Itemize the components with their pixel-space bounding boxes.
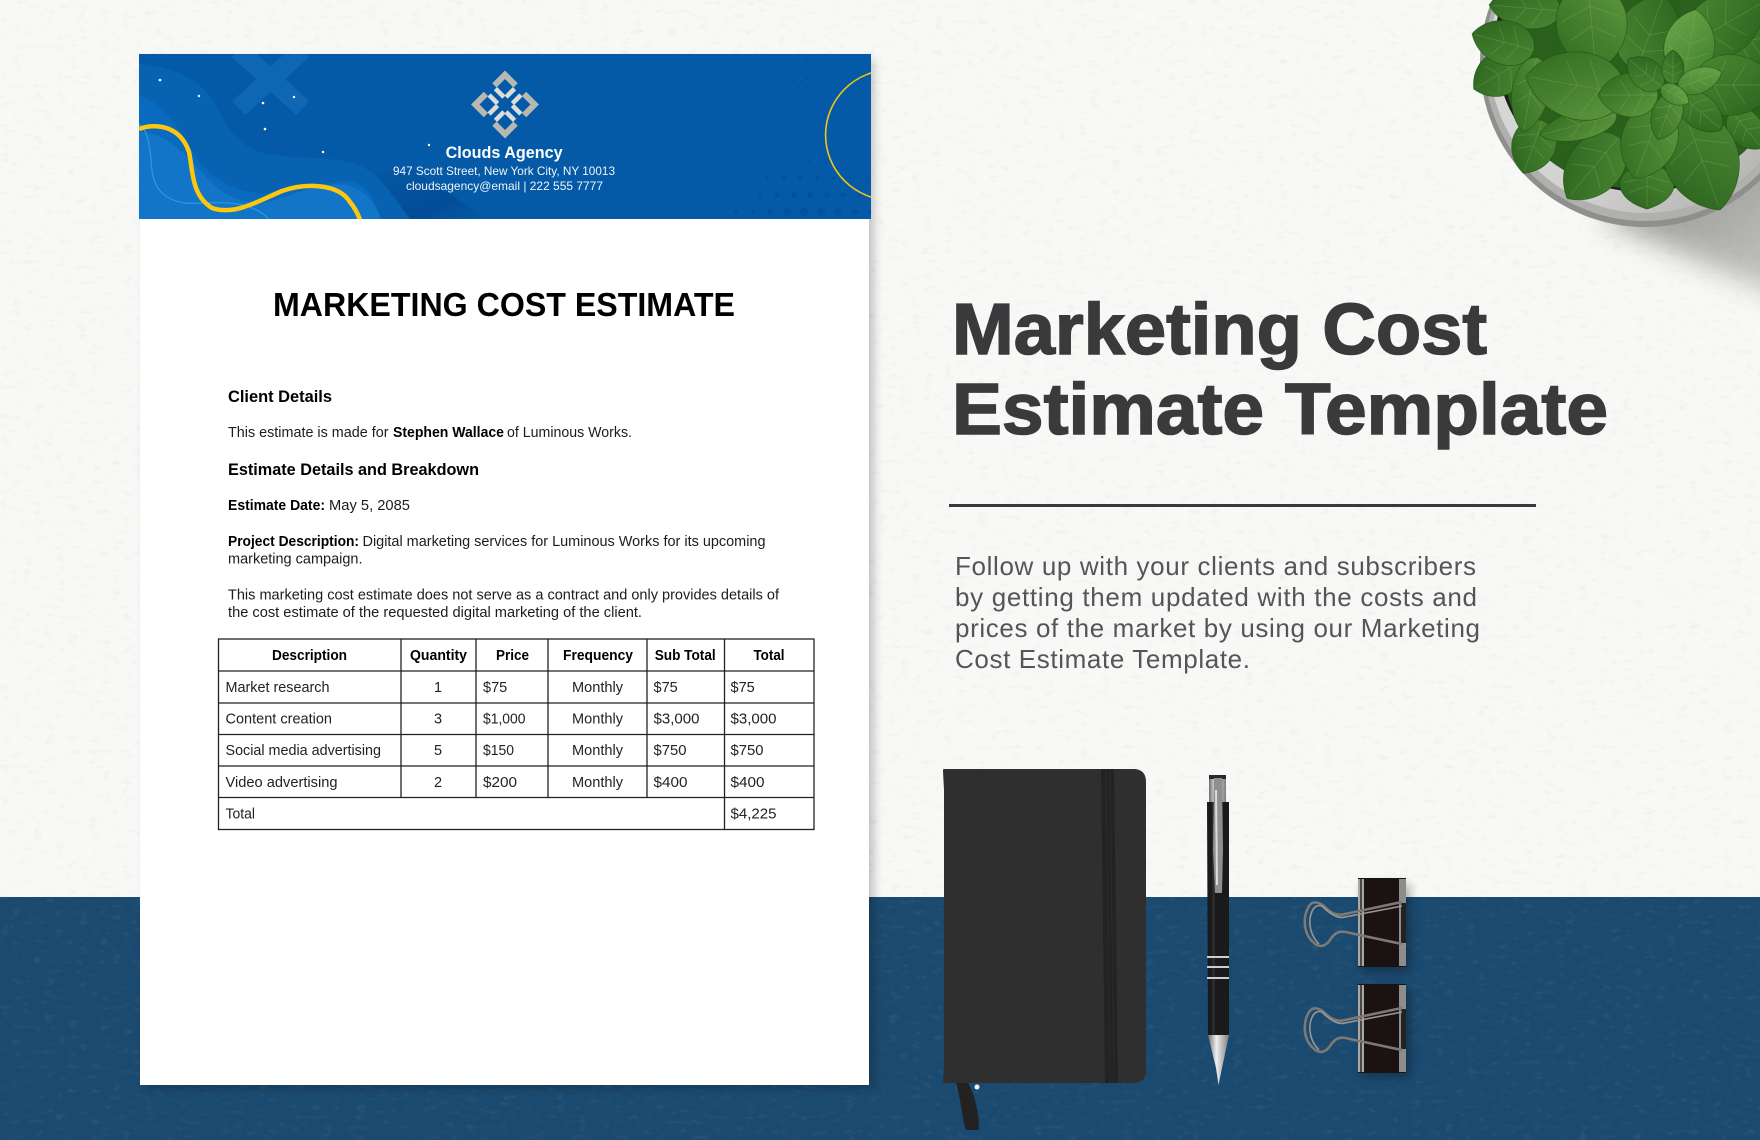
pen clip [1213, 778, 1223, 893]
section: estimate details: Estimate Date: [228, 498, 325, 514]
section: estimate details: May 5, 2085 [329, 498, 410, 514]
row: social media advertising: Social media advertising [226, 743, 381, 759]
description paragraph: Cost Estimate Template. [955, 644, 1250, 674]
main heading [952, 290, 1608, 450]
row: video advertising: Video advertising [226, 775, 338, 791]
section: client details: Stephen Wallace [393, 425, 504, 441]
plant pot with leaves [1463, 0, 1760, 300]
pen barrel [1207, 802, 1229, 1035]
row: grand total: $4,225 [730, 806, 776, 822]
bookmark ribbon [956, 1083, 979, 1130]
small dot grid [792, 61, 827, 88]
row: content creation: $1,000 [483, 712, 526, 728]
agency name: Clouds Agency [446, 144, 563, 162]
yellow curve [139, 126, 360, 220]
agency contact: cloudsagency@email | 222 555 7777 [406, 179, 603, 193]
pen rings [1207, 956, 1229, 979]
wave layers [392, 179, 470, 219]
pen top cap [1209, 776, 1226, 804]
row: market research: $75 [730, 680, 755, 696]
table header row: Quantity [410, 648, 467, 664]
yellow circle [824, 72, 871, 198]
row: content creation: Content creation [226, 712, 332, 728]
agency address: 947 Scott Street, New York City, NY 10013 [393, 164, 615, 178]
row: video advertising: $400 [730, 775, 764, 791]
row: content creation [226, 712, 776, 728]
upper binder clip [1305, 878, 1410, 972]
pen [1207, 775, 1229, 1085]
background: navy band [0, 897, 1760, 1140]
section: estimate details: Digital marketing services for Luminous Works for its upcoming [362, 534, 766, 550]
white dots [159, 79, 430, 153]
row: grand total [226, 806, 776, 822]
section: client details: This estimate is made for [228, 425, 389, 441]
pen tip [1208, 1035, 1229, 1085]
description paragraph: by getting them updated with the costs and [955, 582, 1477, 612]
row: market research: $75 [483, 680, 507, 696]
row: social media advertising: $150 [483, 743, 514, 759]
table header row [272, 648, 784, 664]
section: client details [228, 388, 632, 441]
row: video advertising: Monthly [572, 775, 624, 791]
pot [1480, 0, 1760, 227]
description paragraph: prices of the market by using our Marketing [955, 613, 1480, 643]
table header row: Description [272, 648, 347, 664]
basil leaves [1463, 0, 1760, 223]
table header row: Price [496, 648, 529, 664]
main heading: Marketing Cost [952, 290, 1487, 370]
row: social media advertising [226, 743, 764, 759]
section: estimate details: marketing campaign. [228, 552, 362, 568]
row: grand total: Total [226, 806, 255, 822]
section: estimate details: the cost estimate of the requested digital marketing of the client. [228, 605, 642, 621]
row: video advertising: $200 [483, 775, 517, 791]
page shadow [146, 60, 874, 1088]
row: market research: Monthly [572, 680, 624, 696]
row: content creation: Monthly [572, 712, 624, 728]
row: market research [226, 680, 755, 696]
page sheet [140, 54, 869, 1085]
section: estimate details [228, 461, 780, 621]
section: client details: of Luminous Works. [507, 425, 632, 441]
row: content creation: $3,000 [654, 712, 700, 728]
row: market research: 1 [434, 680, 442, 696]
letterhead banner [139, 54, 871, 219]
row: video advertising: $400 [654, 775, 688, 791]
description paragraph: Follow up with your clients and subscribers [955, 551, 1476, 581]
row: content creation: 3 [434, 712, 442, 728]
cost table [218, 639, 814, 830]
description paragraph [955, 551, 1480, 674]
thin blue curve [139, 124, 269, 219]
elastic band [1101, 769, 1118, 1083]
main heading: Estimate Template [952, 370, 1608, 450]
row: social media advertising: $750 [654, 743, 686, 759]
table header row: Sub Total [655, 648, 716, 664]
lower binder clip [1305, 984, 1410, 1077]
row: social media advertising: Monthly [572, 743, 624, 759]
section: estimate details: Estimate Details and Breakdown [228, 461, 479, 479]
row: market research: $75 [654, 680, 678, 696]
row: market research: Market research [226, 680, 330, 696]
section: estimate details: Project Description: [228, 534, 359, 550]
icon: agency logo [475, 75, 535, 134]
row: content creation: $3,000 [730, 712, 776, 728]
row: video advertising [226, 775, 764, 791]
document page [139, 50, 956, 1088]
row: video advertising: 2 [434, 775, 442, 791]
binder clips [1305, 878, 1410, 1077]
notebook [943, 769, 1146, 1130]
table header row: Total [754, 648, 784, 664]
row: social media advertising: 5 [434, 743, 442, 759]
section: estimate details: This marketing cost estimate does not serve as a contract and only provides details of [228, 588, 780, 604]
heading divider [949, 504, 1536, 507]
document title: MARKETING COST ESTIMATE [273, 286, 735, 323]
table header row: Frequency [563, 648, 633, 664]
watermark cross [238, 50, 303, 108]
notebook cover [943, 769, 1146, 1083]
section: client details: Client Details [228, 388, 332, 406]
halftone dots [701, 144, 874, 216]
pot shadow [1596, 180, 1760, 302]
row: social media advertising: $750 [730, 743, 764, 759]
